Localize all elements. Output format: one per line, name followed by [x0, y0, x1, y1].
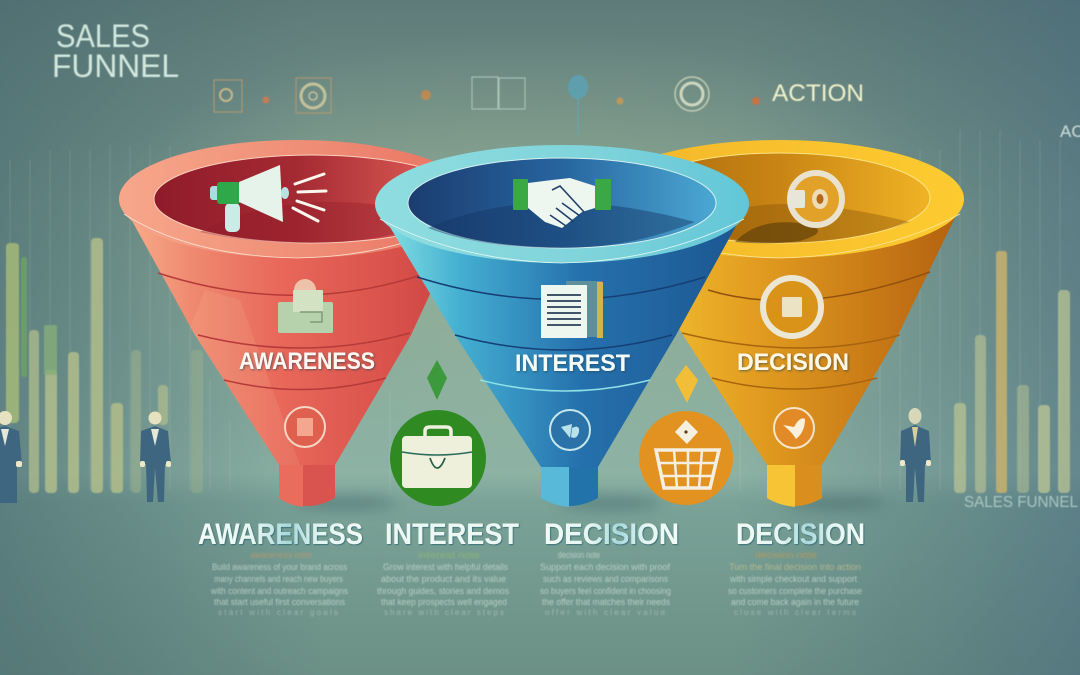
text block: decision one: such as reviews and comparisons	[543, 574, 668, 584]
text block: awareness: that start useful first conversations	[214, 597, 345, 607]
text block: awareness: many channels and reach new buyers	[214, 574, 343, 584]
text block: decision one: the offer that matches their needs	[542, 597, 670, 607]
person: left	[140, 412, 171, 502]
icon: document bag	[278, 279, 333, 333]
text block: decision one: offer with clear value	[545, 608, 666, 617]
person: right	[900, 408, 931, 502]
text block: interest: through guides, stories and demos	[377, 586, 509, 596]
text block: awareness: with content and outreach campaigns	[210, 586, 348, 596]
arrow: green diamond	[427, 360, 447, 400]
floor shadows	[295, 497, 885, 509]
funnel: blue interest	[375, 145, 749, 507]
icon: ring with square	[763, 278, 821, 336]
title: SALES	[56, 18, 150, 54]
icon: green briefcase	[390, 410, 486, 506]
funnel: red awareness	[119, 140, 475, 507]
label: funnel awareness: AWARENESS	[239, 348, 375, 375]
bar chart: left	[6, 238, 203, 493]
text block: awareness: Build awareness of your brand across	[212, 562, 347, 572]
icon: megaphone	[210, 165, 326, 232]
text block: awareness: awareness note	[250, 550, 312, 560]
text block: decision two: decision note	[755, 550, 817, 560]
heading: awareness: AWARENESS	[198, 518, 363, 551]
text block: decision two	[728, 550, 862, 617]
text block: interest: interest note	[418, 550, 480, 560]
text block: decision two: so customers complete the purchase	[728, 586, 862, 596]
icon: blue badge	[550, 410, 590, 450]
heading: decision one: DECISION	[544, 518, 679, 551]
text block: awareness	[210, 550, 348, 617]
label: funnel decision: DECISION	[737, 349, 849, 376]
top icon row	[214, 75, 760, 135]
icon: handshake	[513, 178, 611, 228]
text block: interest: Grow interest with helpful details	[383, 562, 508, 572]
text block: interest: about the product and its value	[381, 574, 506, 584]
icon: target ring	[788, 173, 842, 225]
text block: decision two: and come back again in the future	[731, 597, 859, 607]
text block: decision two: close with clear terms	[734, 608, 856, 617]
icon: document stack	[541, 281, 603, 338]
title: FUNNEL	[52, 48, 179, 84]
arrow: yellow diamond	[675, 365, 698, 403]
person: far left	[0, 411, 22, 503]
icon: yellow badge	[774, 408, 814, 448]
text block: interest: share with clear steps	[384, 608, 504, 617]
text block: decision two: with simple checkout and support	[729, 574, 857, 584]
text block: decision one: Support each decision with proof	[540, 562, 670, 572]
text block: decision two: Turn the final decision into action	[729, 562, 861, 572]
text block: decision one: decision note	[558, 550, 600, 560]
text block: interest	[377, 550, 509, 617]
title	[52, 18, 179, 84]
heading: decision two: DECISION	[736, 518, 865, 551]
action label: ACTION	[772, 80, 864, 107]
heading: interest: INTEREST	[385, 518, 519, 551]
icon: red badge	[285, 407, 325, 447]
funnel: yellow decision	[596, 140, 964, 507]
text block: decision one	[540, 550, 671, 617]
label: funnel interest: INTEREST	[515, 350, 630, 377]
icon: orange basket	[639, 411, 733, 505]
text block: interest: that keep prospects well engaged	[381, 597, 507, 607]
bar chart: right	[954, 251, 1070, 493]
text block: awareness: start with clear goals	[218, 608, 338, 617]
text block: decision one: so buyers feel confident in choosing	[540, 586, 671, 596]
